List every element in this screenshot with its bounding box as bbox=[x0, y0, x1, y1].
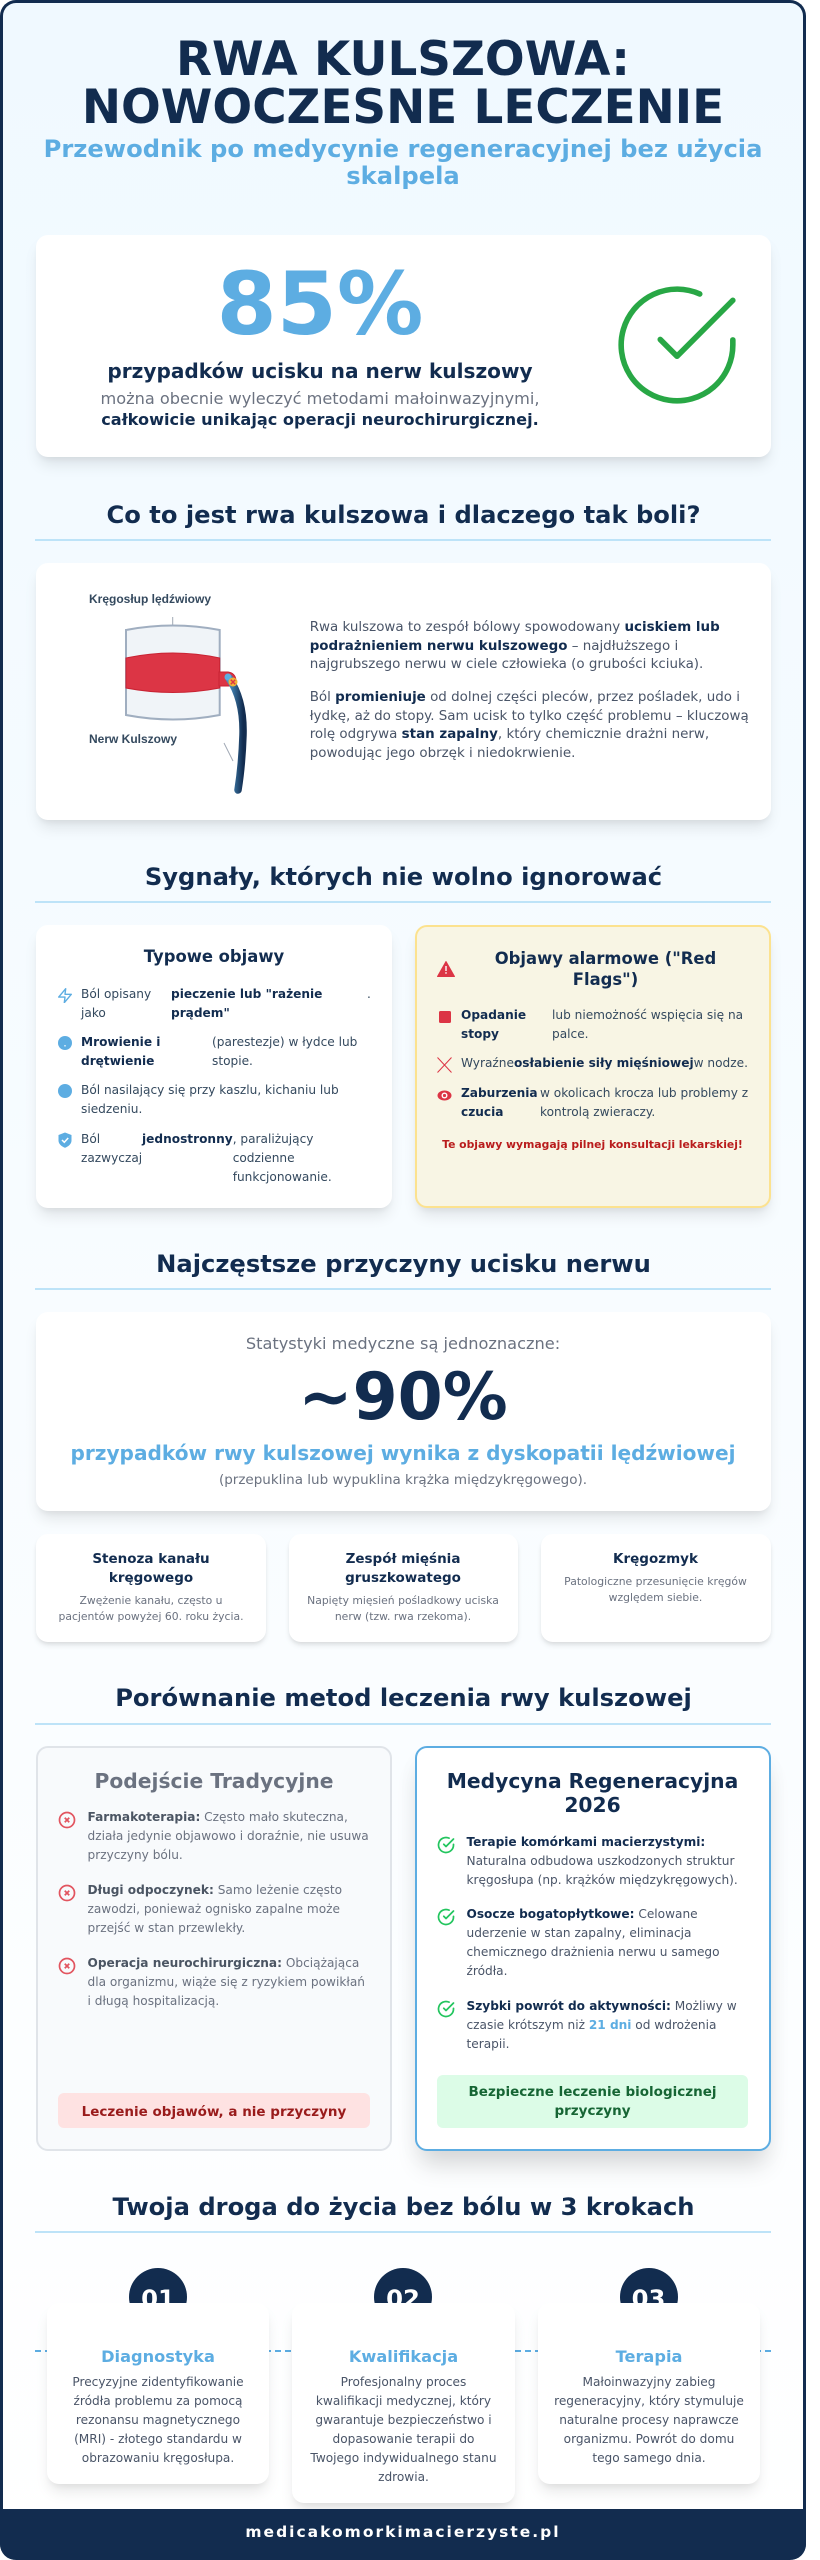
step number 03: 03 bbox=[632, 2284, 665, 2313]
heading: comparison: Porównanie metod leczenia rwy kulszowej bbox=[115, 1684, 692, 1712]
explanation paragraph 1: Rwa kulszowa to zespół bólowy spowodowany uciskiem lub bbox=[310, 620, 720, 635]
symptom: tingling: Mrowienie i drętwienie bbox=[81, 1035, 160, 1068]
traditional item 3: Operacja neurochirurgiczna: Obciążająca bbox=[88, 1956, 359, 1970]
regenerative item 3: czasie krótszym niż 21 dni od wdrożenia bbox=[466, 2018, 716, 2032]
stat note: (przepuklina lub wypuklina krążka międzykręgowego). bbox=[219, 1472, 587, 1488]
icon: warning triangle bbox=[437, 961, 455, 977]
regenerative result badge: Bezpieczne leczenie biologicznej bbox=[468, 2084, 716, 2100]
panel: explanation bbox=[36, 563, 770, 820]
panel title: Podejście Tradycyjne bbox=[95, 1769, 333, 1793]
panel: stenosis bbox=[36, 1534, 266, 1642]
title: gruszkowatego bbox=[345, 1570, 461, 1586]
step text: (MRI) - złotego standardu w bbox=[74, 2432, 242, 2446]
title bbox=[345, 1551, 461, 1586]
step text: rezonansu magnetycznego bbox=[76, 2413, 240, 2427]
step title: Kwalifikacja bbox=[349, 2347, 458, 2366]
explanation paragraph 2: łydkę, aż do stopy. Sam ucisk to tylko część problemu – kluczową bbox=[310, 708, 749, 724]
footer: medicakomorkimacierzyste.pl bbox=[245, 2523, 561, 2541]
stat number: ~90% bbox=[298, 1360, 508, 1435]
explanation paragraph 1 bbox=[310, 620, 720, 672]
panel: traditional approach bbox=[36, 1746, 392, 2151]
explanation paragraph 2: powodując jego obrzęk i niedokrwienie. bbox=[310, 746, 575, 761]
symptom: one-sided pain bbox=[58, 1132, 332, 1184]
stat caption: przypadków rwy kulszowej wynika z dyskopatii lędźwiowej bbox=[70, 1441, 736, 1465]
step text: obrazowaniu kręgosłupa. bbox=[82, 2451, 234, 2465]
symptom: tingling: (parestezje) w łydce lub stopie. bbox=[212, 1035, 357, 1068]
regenerative item 2: źródła. bbox=[466, 1964, 507, 1978]
traditional item 2 bbox=[58, 1883, 342, 1935]
regenerative item 1: Naturalna odbudowa uszkodzonych struktur bbox=[466, 1854, 734, 1868]
subtitle: skalpela bbox=[346, 162, 460, 190]
stat number: 85% bbox=[217, 255, 423, 355]
description: nerw (tzw. rwa rzekoma). bbox=[335, 1610, 471, 1623]
description bbox=[564, 1575, 747, 1604]
spine diagram: Kręgosłup lędźwiowy bbox=[89, 592, 211, 606]
symptom: burning pain: . bbox=[367, 987, 371, 1001]
panel title: Typowe objawy bbox=[144, 947, 284, 966]
stat description: można obecnie wyleczyć metodami małoinwazyjnymi, bbox=[101, 389, 539, 408]
regenerative item 2: Osocze bogatopłytkowe: Celowane bbox=[466, 1907, 698, 1921]
step card: therapy bbox=[538, 2303, 760, 2484]
dashed connector line bbox=[35, 2350, 771, 2352]
symptom: worsening pain: Ból nasilający się przy kaszlu, kichaniu lub siedzeniu. bbox=[81, 1083, 339, 1116]
regenerative item 2 bbox=[438, 1907, 720, 1978]
step text bbox=[554, 2375, 744, 2465]
step number 02: 02 bbox=[386, 2284, 420, 2313]
step title: Diagnostyka bbox=[101, 2347, 215, 2366]
description: względem siebie. bbox=[609, 1591, 702, 1604]
red flag: foot drop: lub niemożność wspięcia się na palce. bbox=[552, 1008, 743, 1041]
main title: RWA KULSZOWA: bbox=[176, 33, 630, 87]
title bbox=[92, 1551, 210, 1586]
explanation paragraph 2 bbox=[310, 690, 749, 761]
regenerative result badge: przyczyny bbox=[554, 2103, 631, 2119]
step text: zdrowia. bbox=[378, 2470, 429, 2484]
panel: red flags bbox=[415, 925, 770, 1208]
symptom: tingling bbox=[58, 1035, 357, 1068]
step text bbox=[72, 2375, 244, 2465]
regenerative item 3 bbox=[438, 1999, 737, 2051]
title: Stenoza kanału bbox=[92, 1551, 210, 1567]
panel: piriformis syndrome bbox=[288, 1534, 518, 1642]
step text: gwarantuje bezpieczeństwo i bbox=[315, 2413, 492, 2427]
red flag: numbness: w okolicach krocza lub problemy z kontrolą zwieraczy. bbox=[540, 1086, 748, 1119]
description: Patologiczne przesunięcie kręgów bbox=[564, 1575, 747, 1588]
regenerative item 1: kręgosłupa (np. krążków międzykręgowych). bbox=[466, 1873, 738, 1887]
regenerative item 2: chemicznego drażnienia nerwu u samego bbox=[466, 1945, 720, 1959]
traditional item 3 bbox=[58, 1956, 365, 2008]
subtitle bbox=[44, 135, 762, 190]
red flag: muscle weakness bbox=[437, 1056, 748, 1073]
symptom: one-sided pain: jednostronny bbox=[142, 1132, 233, 1146]
panel title bbox=[495, 949, 716, 989]
regenerative item 1 bbox=[438, 1835, 738, 1887]
stat description: całkowicie unikając operacji neurochirurgicznej. bbox=[101, 410, 539, 429]
symptom: burning pain: pieczenie lub "rażenie prądem" bbox=[171, 987, 322, 1020]
step text: naturalne procesy naprawcze bbox=[559, 2413, 739, 2427]
traditional item 1: przyczyny bólu. bbox=[88, 1848, 183, 1862]
urgent note: Te objawy wymagają pilnej konsultacji lekarskiej! bbox=[442, 1138, 743, 1151]
step text: tego samego dnia. bbox=[592, 2451, 706, 2465]
subtitle: Przewodnik po medycynie regeneracyjnej bez użycia bbox=[44, 135, 762, 163]
step number 01 bbox=[129, 2268, 187, 2326]
red flag: muscle weakness: osłabienie siły mięśniowej bbox=[514, 1056, 694, 1070]
main title: NOWOCZESNE LECZENIE bbox=[82, 81, 724, 135]
icon: green check circle bbox=[618, 286, 736, 404]
regenerative item 3: terapii. bbox=[466, 2037, 509, 2051]
step text: regeneracyjny, który stymuluje bbox=[554, 2394, 744, 2408]
panel title: Objawy alarmowe ("Red bbox=[495, 949, 716, 968]
step title: Terapia bbox=[616, 2347, 682, 2366]
symptom: one-sided pain: , paraliżujący codzienne funkcjonowanie. bbox=[233, 1132, 332, 1184]
step card: qualification bbox=[292, 2303, 515, 2503]
traditional result badge: Leczenie objawów, a nie przyczyny bbox=[82, 2104, 346, 2120]
traditional item 3: dla organizmu, wiąże się z ryzykiem powikłań bbox=[88, 1975, 365, 1989]
traditional item 2: zawodzi, ponieważ ognisko zapalne może bbox=[88, 1902, 340, 1916]
step text: dopasowanie terapii do bbox=[333, 2432, 474, 2446]
traditional item 1 bbox=[58, 1810, 369, 1862]
heading: what is sciatica: Co to jest rwa kulszowa i dlaczego tak boli? bbox=[106, 501, 700, 529]
traditional result badge bbox=[58, 2093, 370, 2128]
description bbox=[307, 1594, 499, 1623]
description bbox=[58, 1594, 244, 1623]
spine diagram bbox=[89, 592, 247, 794]
regenerative result badge bbox=[437, 2075, 748, 2128]
panel: typical symptoms bbox=[36, 925, 392, 1208]
red flag: numbness: Zaburzenia czucia bbox=[461, 1086, 538, 1119]
explanation paragraph 2: rolę odgrywa stan zapalny, który chemicznie drażni nerw, bbox=[310, 727, 709, 742]
step text: kwalifikacji medycznej, który bbox=[316, 2394, 491, 2408]
red flag: muscle weakness: Wyraźne bbox=[461, 1056, 514, 1070]
heading: three steps: Twoja droga do życia bez bólu w 3 krokach bbox=[112, 2193, 694, 2221]
heading: warning signals: Sygnały, których nie wolno ignorować bbox=[145, 863, 662, 891]
red flag: numbness bbox=[438, 1086, 748, 1119]
stat caption: przypadków ucisku na nerw kulszowy bbox=[107, 359, 533, 383]
regenerative item 1: Terapie komórkami macierzystymi: bbox=[466, 1835, 705, 1849]
red flag: muscle weakness: w nodze. bbox=[694, 1056, 748, 1070]
explanation paragraph 1: najgrubszego nerwu w ciele człowieka (o grubości kciuka). bbox=[310, 657, 703, 672]
panel: key statistic 85% bbox=[36, 235, 770, 457]
step text: Małoinwazyjny zabieg bbox=[583, 2375, 715, 2389]
traditional item 1: działa jedynie objawowo i doraźnie, nie usuwa bbox=[88, 1829, 369, 1843]
panel title: Medycyna Regeneracyjna bbox=[447, 1769, 738, 1793]
panel: regenerative medicine bbox=[415, 1746, 770, 2151]
title: Zespół mięśnia bbox=[346, 1551, 460, 1567]
title: Kręgozmyk bbox=[613, 1551, 698, 1567]
title: kręgowego bbox=[109, 1570, 193, 1586]
main title bbox=[82, 33, 724, 135]
symptom: one-sided pain: Ból zazwyczaj bbox=[81, 1132, 142, 1165]
symptom: burning pain: Ból opisany jako bbox=[81, 987, 151, 1020]
traditional item 2: Długi odpoczynek: Samo leżenie często bbox=[88, 1883, 342, 1897]
regenerative item 3: Szybki powrót do aktywności: Możliwy w bbox=[466, 1999, 737, 2013]
footer bbox=[0, 2509, 806, 2560]
symptom: burning pain bbox=[58, 987, 371, 1020]
traditional item 2: przejść w stan przewlekły. bbox=[88, 1921, 245, 1935]
description: Napięty mięsień pośladkowy uciska bbox=[307, 1594, 499, 1607]
step text: organizmu. Powrót do domu bbox=[564, 2432, 734, 2446]
step text bbox=[310, 2375, 497, 2484]
traditional item 1: Farmakoterapia: Często mało skuteczna, bbox=[88, 1810, 348, 1824]
description: pacjentów powyżej 60. roku życia. bbox=[58, 1610, 244, 1623]
step text: źródła problemu za pomocą bbox=[74, 2394, 242, 2408]
traditional item 3: i długą hospitalizacją. bbox=[88, 1994, 219, 2008]
step text: Precyzyjne zidentyfikowanie bbox=[72, 2375, 244, 2389]
step text: Profesjonalny proces bbox=[341, 2375, 466, 2389]
step text: Twojego indywidualnego stanu bbox=[310, 2451, 497, 2465]
panel: 90% statistic bbox=[36, 1312, 770, 1511]
description: Zwężenie kanału, często u bbox=[80, 1594, 222, 1607]
explanation paragraph 1: podrażnieniem nerwu kulszowego – najdłuższego i bbox=[310, 638, 678, 654]
panel title bbox=[447, 1769, 738, 1817]
red flag: foot drop bbox=[439, 1008, 743, 1041]
stat intro: Statystyki medyczne są jednoznaczne: bbox=[246, 1334, 560, 1353]
step number 01: 01 bbox=[141, 2284, 175, 2313]
explanation paragraph 2: Ból promieniuje od dolnej części pleców, przez pośladek, udo i bbox=[310, 690, 740, 705]
heading: causes: Najczęstsze przyczyny ucisku nerwu bbox=[156, 1250, 651, 1278]
step number 03 bbox=[620, 2268, 678, 2326]
panel: spondylolisthesis bbox=[541, 1534, 770, 1642]
step card: diagnostics bbox=[47, 2303, 269, 2484]
panel title: 2026 bbox=[564, 1793, 621, 1817]
panel title: Flags") bbox=[573, 970, 638, 989]
spine diagram: Nerw Kulszowy bbox=[89, 732, 177, 746]
step number 02 bbox=[374, 2268, 432, 2326]
stat description bbox=[101, 389, 539, 429]
red flag: foot drop: Opadanie stopy bbox=[461, 1008, 526, 1041]
regenerative item 2: uderzenie w stan zapalny, eliminacja bbox=[466, 1926, 691, 1940]
